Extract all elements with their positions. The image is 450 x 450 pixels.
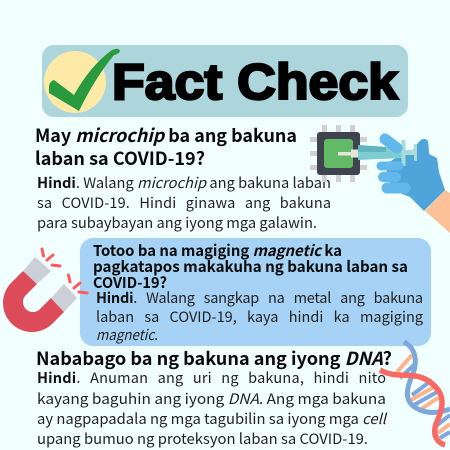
answer text: DNA: upang bumuo ng proteksyon laban sa COVID-19. bbox=[37, 428, 368, 449]
answer text: magnetic: magnetic. bbox=[96, 324, 158, 345]
answer text: magnetic: laban sa COVID-19, kaya hindi ka magiging bbox=[96, 306, 423, 327]
heading: magnetic question: pagkatapos makakuha ng bakuna laban sa bbox=[93, 256, 408, 277]
answer text: DNA: Hindi. Anuman ang uri ng bakuna, hindi nito bbox=[37, 367, 386, 388]
heading: microchip question: laban sa COVID-19? bbox=[35, 145, 205, 171]
icon: check mark on yellow circle bbox=[44, 49, 120, 113]
answer text: microchip bbox=[37, 172, 331, 233]
answer text: microchip: sa COVID-19. Hindi ginawa ang bakuna bbox=[37, 192, 331, 213]
heading: magnetic question bbox=[93, 240, 408, 293]
answer text: microchip: para subaybayan ang iyong mga galawin. bbox=[37, 212, 317, 233]
title text: Fact Check bbox=[112, 54, 398, 110]
title banner bbox=[42, 45, 408, 117]
heading: magnetic question: COVID-19? bbox=[93, 272, 167, 293]
answer text: DNA bbox=[37, 367, 388, 449]
answer text: magnetic: Hindi. Walang sangkap na metal ang bakuna bbox=[96, 287, 423, 308]
icon: DNA helix bbox=[380, 342, 450, 445]
answer text: DNA: ay nagpapadala ng mga tagubilin sa iyong mga cell bbox=[37, 408, 388, 429]
icon: magnet bbox=[3, 249, 87, 332]
heading: magnetic question: Totoo ba na magiging magnetic ka bbox=[93, 240, 342, 261]
icon: chip and syringe in gloved hand bbox=[310, 125, 450, 233]
heading: microchip question: May microchip ba ang bakuna bbox=[35, 122, 297, 148]
answer text: DNA: kayang baguhin ang iyong DNA. Ang mga bakuna bbox=[37, 388, 386, 409]
answer text: magnetic bbox=[96, 287, 423, 345]
heading: microchip question bbox=[35, 122, 297, 171]
heading: DNA question: Nababago ba ng bakuna ang iyong DNA? bbox=[36, 345, 392, 371]
answer text: microchip: Hindi. Walang microchip ang bakuna laban bbox=[37, 172, 331, 193]
section: microchip question bbox=[35, 122, 331, 233]
section: DNA question bbox=[36, 345, 392, 449]
panel: magnetic question bbox=[80, 238, 431, 346]
